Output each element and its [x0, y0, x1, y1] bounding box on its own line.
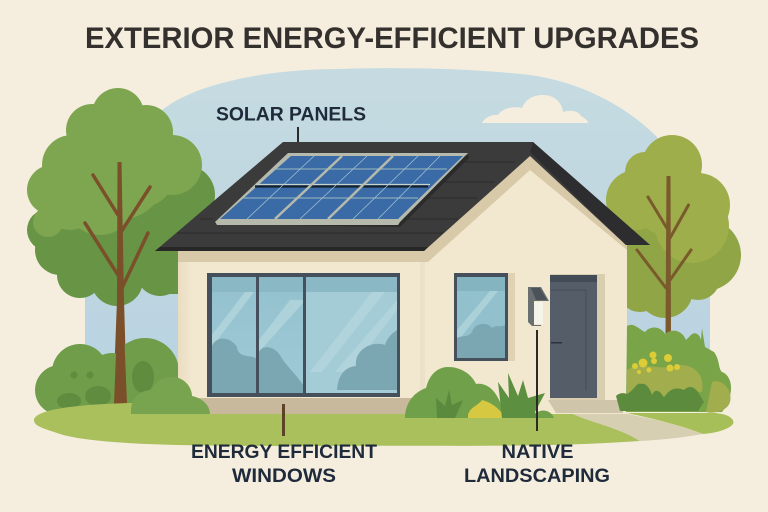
roof	[155, 127, 650, 251]
foundation	[178, 398, 425, 418]
lawn	[34, 403, 640, 446]
doorstep	[548, 400, 623, 413]
tree: right	[606, 135, 741, 334]
window: large energy-efficient	[207, 273, 400, 397]
tree trunk and branches	[113, 162, 127, 404]
sky backdrop	[85, 68, 710, 410]
label: native landscaping: LANDSCAPING	[464, 465, 610, 487]
shrubs right with yellow flowers	[616, 325, 731, 413]
antenna	[297, 127, 299, 142]
wall shadow under eaves	[178, 152, 627, 262]
shrubs left	[35, 338, 179, 415]
label: solar panels: SOLAR PANELS	[216, 104, 366, 126]
title: EXTERIOR ENERGY-EFFICIENT UPGRADES	[85, 22, 699, 55]
label: native landscaping: NATIVE	[502, 441, 574, 463]
solar light fixture	[528, 287, 549, 326]
walkway	[573, 414, 703, 441]
shrub: center left of lawn	[131, 377, 210, 414]
wall corner	[420, 262, 425, 402]
icon: cloud	[482, 95, 588, 123]
shrubs: under small window	[405, 367, 554, 418]
tree: left	[27, 88, 215, 404]
leader line: native landscaping	[536, 330, 538, 431]
label: energy efficient windows: ENERGY EFFICIENT	[191, 441, 377, 463]
left tree trunk base overlay	[114, 330, 127, 404]
door	[550, 274, 605, 400]
solar panels	[215, 153, 469, 227]
label: energy efficient windows: WINDOWS	[232, 465, 336, 487]
leader line: windows	[282, 404, 285, 436]
wall left shading	[178, 262, 192, 402]
tree trunk and branches	[666, 176, 671, 334]
house wall	[178, 155, 627, 416]
lawn right	[627, 413, 733, 434]
window: small	[454, 273, 515, 361]
